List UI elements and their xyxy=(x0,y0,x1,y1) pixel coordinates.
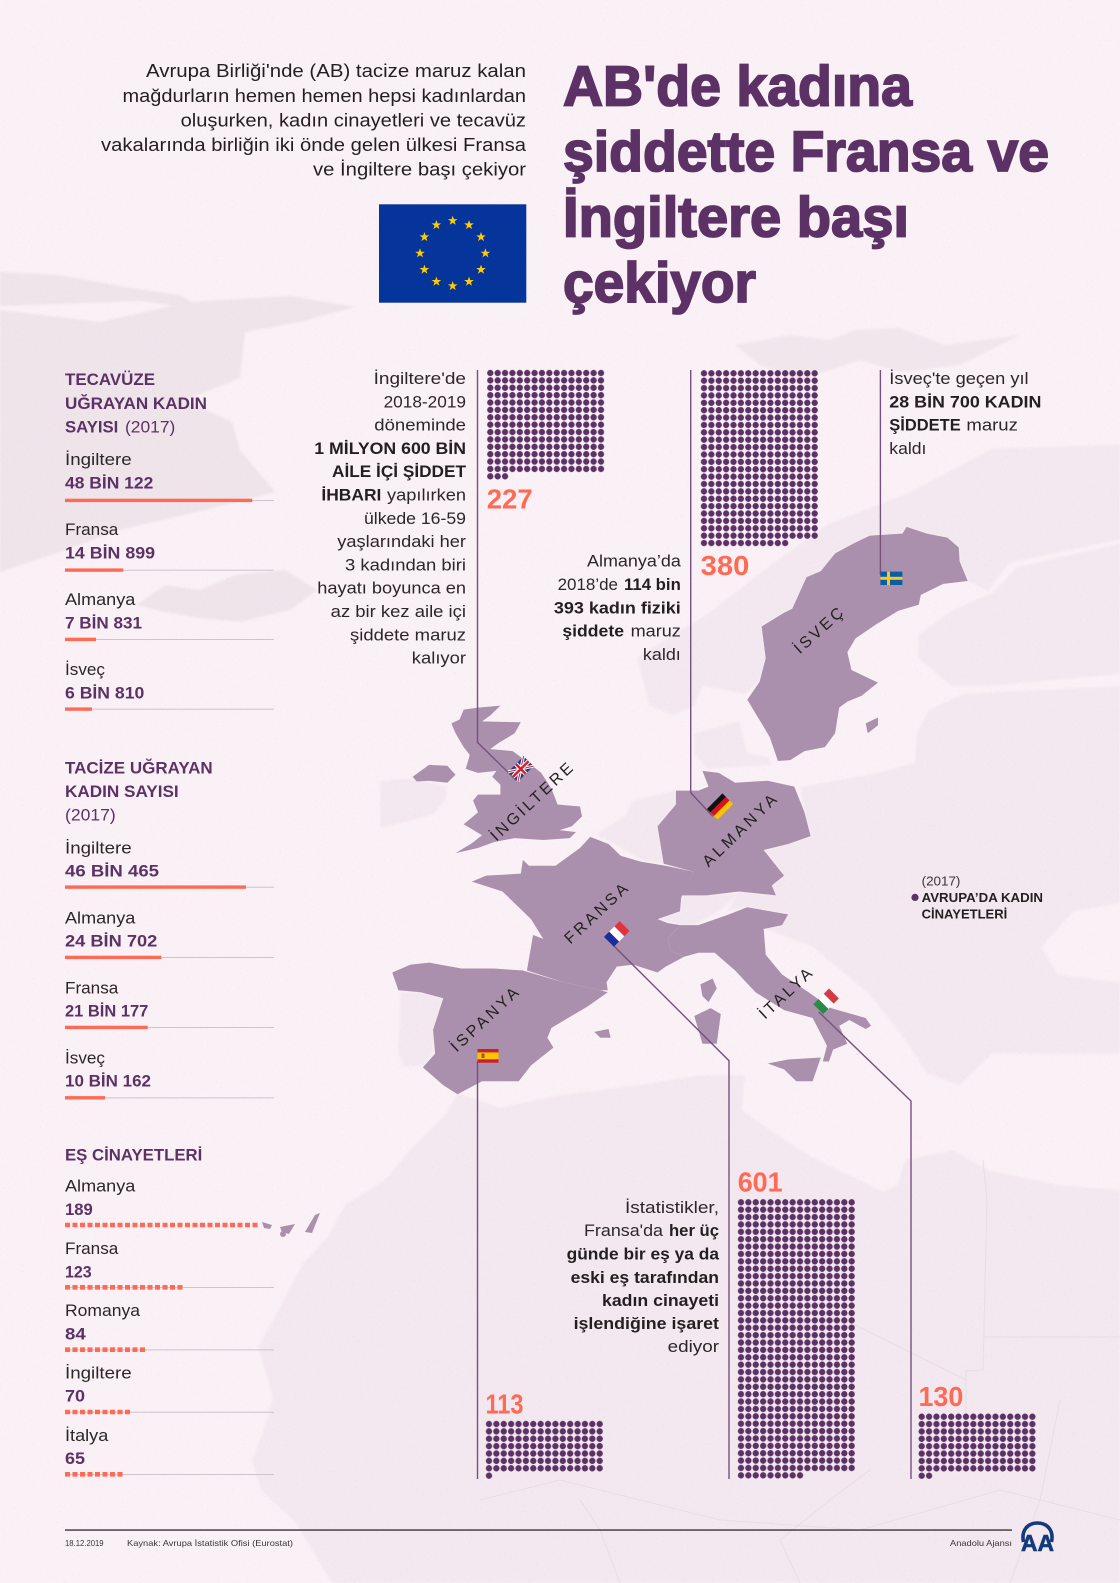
text block: İngiltere: az bir kez aile içi xyxy=(331,602,466,621)
text block: Fransa: ediyor xyxy=(668,1337,719,1356)
intro text: oluşurken, kadın cinayetleri ve tecavüz xyxy=(181,111,526,131)
heading xyxy=(65,370,207,436)
flag: Germany xyxy=(707,793,733,820)
flag: Italy xyxy=(813,989,839,1014)
title: AB'de kadına xyxy=(563,55,913,119)
legend: CİNAYETLERİ xyxy=(922,907,1007,922)
number: 113: 113 xyxy=(486,1388,524,1419)
flag: UK xyxy=(508,756,534,782)
dotted bar rows: 70 xyxy=(65,1387,85,1406)
country: Germany xyxy=(658,771,811,895)
title: İngiltere başı xyxy=(563,186,909,250)
bar rows: 6 BİN 810 xyxy=(65,683,144,702)
footer: 18.12.2019 xyxy=(65,1538,104,1548)
text block: İngiltere: İHBARI xyxy=(321,486,381,504)
number: 130: 130 xyxy=(918,1381,963,1412)
text block: İngiltere: İngiltere'de xyxy=(374,369,466,388)
text block: Almanya: Almanya’da xyxy=(587,551,681,570)
dot grid: 601 xyxy=(737,1199,855,1479)
heading xyxy=(65,758,213,824)
heading: (2017) xyxy=(65,805,116,824)
panel: tecavüz xyxy=(65,370,274,711)
bar rows: İngiltere xyxy=(65,839,132,858)
text block: Fransa: her üç xyxy=(669,1221,719,1240)
intro text: mağdurların hemen hemen hepsi kadınlardan xyxy=(122,86,526,106)
dotted bar rows: Romanya xyxy=(65,1301,141,1320)
bar rows: Fransa xyxy=(65,520,119,539)
number: 227: 227 xyxy=(487,483,533,514)
text block: Almanya: maruz xyxy=(631,622,681,641)
dotted bar rows: İngiltere xyxy=(65,1363,132,1382)
footer: Kaynak: Avrupa İstatistik Ofisi (Eurostat) xyxy=(127,1538,293,1548)
text block: İngiltere: 2018-2019 xyxy=(384,392,466,411)
flag: Sweden xyxy=(880,572,902,585)
dot grid: 130 xyxy=(918,1413,1036,1479)
text block: İngiltere: kalıyor xyxy=(412,649,466,668)
heading: EŞ CİNAYETLERİ xyxy=(65,1146,202,1165)
text block: İsveç: İsveç'te geçen yıl xyxy=(889,369,1029,388)
text block: İsveç xyxy=(889,369,1041,458)
text block: İngiltere: şiddete maruz xyxy=(350,625,466,644)
panel: taciz xyxy=(65,758,274,1100)
number: 601: 601 xyxy=(738,1167,783,1198)
label: Fransa: FRANSA xyxy=(561,880,632,948)
text block: İsveç: maruz xyxy=(966,416,1018,435)
text block: İngiltere: yaşlarındaki her xyxy=(337,532,466,551)
text block: Almanya: 114 bin xyxy=(624,575,681,594)
text block: İngiltere: 3 kadından biri xyxy=(345,555,466,574)
panel: eş cinayetleri xyxy=(65,1146,274,1475)
text block: İngiltere: AİLE İÇİ ŞİDDET xyxy=(332,462,467,481)
heading: KADIN SAYISI xyxy=(65,782,179,801)
heading: TECAVÜZE xyxy=(65,370,155,389)
connector lines xyxy=(478,370,911,1479)
country: Sweden xyxy=(747,527,968,761)
country: France xyxy=(472,837,693,990)
bar rows xyxy=(65,450,274,711)
footer: Anadolu Ajansı xyxy=(950,1538,1012,1548)
label: İngiltere: İNGİLTERE xyxy=(486,759,577,845)
text block: Fransa: günde bir eş ya da xyxy=(567,1245,720,1264)
text block: İsveç: ŞİDDETE xyxy=(889,416,961,435)
legend: AVRUPA’DA KADIN xyxy=(922,890,1043,905)
dotted bar rows: Almanya xyxy=(65,1177,136,1196)
dot grid: 380 xyxy=(700,370,818,547)
text block: Almanya: 2018’de xyxy=(558,575,618,594)
highlighted countries map xyxy=(392,527,968,1094)
footer xyxy=(65,1523,1054,1556)
text block: İngiltere: hayatı boyunca en xyxy=(317,579,466,598)
text block: İngiltere: döneminde xyxy=(374,416,466,435)
bar rows: 21 BİN 177 xyxy=(65,1002,148,1021)
dotted bar rows xyxy=(65,1177,274,1475)
heading: SAYISI xyxy=(65,417,118,436)
dotted bar rows: 84 xyxy=(65,1324,86,1343)
text block: Fransa: Fransa'da xyxy=(584,1221,664,1240)
title xyxy=(563,55,1049,315)
heading: UĞRAYAN KADIN xyxy=(65,394,207,413)
bar rows xyxy=(65,839,274,1100)
label: Almanya: ALMANYA xyxy=(700,791,781,871)
country: United Kingdom xyxy=(413,706,582,853)
text block: İsveç: 28 BİN 700 KADIN xyxy=(889,392,1041,411)
text block: İsveç: kaldı xyxy=(889,439,926,458)
text block: Almanya: şiddete xyxy=(562,622,624,641)
flag: France xyxy=(604,921,630,947)
title: şiddette Fransa ve xyxy=(563,120,1049,184)
bar rows: 46 BİN 465 xyxy=(65,862,159,881)
bar rows: 10 BİN 162 xyxy=(65,1072,151,1091)
text block: İngiltere: 1 MİLYON 600 BİN xyxy=(314,439,466,458)
dotted bar rows: Fransa xyxy=(65,1239,119,1258)
intro text: vakalarında birliğin iki önde gelen ülkesi Fransa xyxy=(101,135,527,155)
number: 380: 380 xyxy=(701,550,749,581)
legend: (2017) xyxy=(922,874,960,888)
text block: İngiltere: ülkede 16-59 xyxy=(364,509,466,528)
dot grid: 227 xyxy=(487,369,605,480)
country: Spain xyxy=(392,963,611,1094)
island: Gotland xyxy=(866,717,878,733)
intro text: ve İngiltere başı çekiyor xyxy=(313,160,526,180)
intro text xyxy=(101,61,527,180)
label: İtalya: İTALYA xyxy=(755,964,816,1023)
country labels xyxy=(446,603,847,1056)
bar rows: İsveç xyxy=(65,1049,105,1068)
title: çekiyor xyxy=(563,251,756,315)
dotted bar rows: 189 xyxy=(65,1200,93,1219)
canary islands xyxy=(262,1213,320,1237)
dotted bar rows: 123 xyxy=(65,1262,92,1281)
text block: Fransa: kadın cinayeti xyxy=(602,1291,719,1310)
text block: Almanya xyxy=(554,551,681,664)
text block: Fransa: İstatistikler, xyxy=(625,1198,719,1217)
bar rows: 14 BİN 899 xyxy=(65,543,155,562)
bar rows: 48 BİN 122 xyxy=(65,473,153,492)
label: İspanya: İSPANYA xyxy=(446,983,523,1056)
heading: (2017) xyxy=(125,417,175,436)
text block: İngiltere: yapılırken xyxy=(387,486,466,504)
bar rows: İsveç xyxy=(65,660,105,679)
text block: Fransa: eski eş tarafından xyxy=(571,1268,719,1287)
bar rows: 24 BİN 702 xyxy=(65,932,157,951)
intro text: Avrupa Birliği'nde (AB) tacize maruz kalan xyxy=(146,61,526,81)
icon: EU flag xyxy=(379,204,526,303)
bar rows: Almanya xyxy=(65,590,136,609)
dot grid: 113 xyxy=(485,1420,603,1479)
text block: Almanya: 393 kadın fiziki xyxy=(554,598,681,618)
heading: TACİZE UĞRAYAN xyxy=(65,758,213,777)
bar rows: 7 BİN 831 xyxy=(65,613,142,632)
bar rows: Almanya xyxy=(65,909,136,928)
bar rows: Fransa xyxy=(65,979,119,998)
text block: Almanya: kaldı xyxy=(643,645,681,664)
legend xyxy=(911,874,1043,922)
text block: İngiltere xyxy=(314,369,467,668)
flags xyxy=(478,572,902,1063)
dotted bar rows: 65 xyxy=(65,1449,85,1468)
text block: Fransa xyxy=(567,1198,720,1356)
dotted bar rows: İtalya xyxy=(65,1426,109,1445)
country: Italy xyxy=(668,907,871,1081)
bar rows: İngiltere xyxy=(65,450,132,469)
text block: Fransa: işlendiğine işaret xyxy=(574,1314,719,1333)
flag: Spain xyxy=(478,1049,498,1063)
label: İsveç: İSVEÇ xyxy=(790,603,847,658)
icon: AA logo: AA xyxy=(1021,1530,1054,1556)
